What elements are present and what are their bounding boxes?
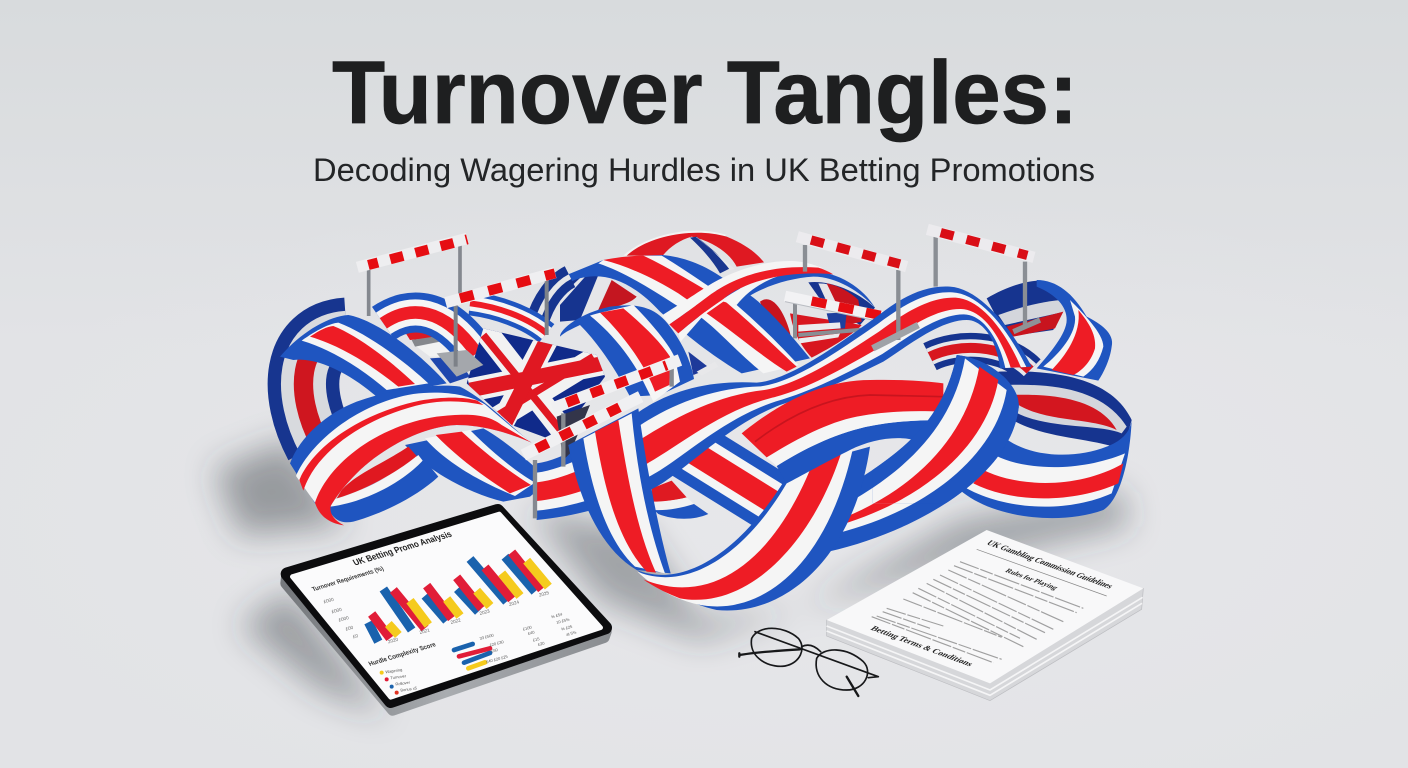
ribbon: lower left return [328,428,550,522]
ribbon: lower right loop [930,348,1132,518]
score legend: at 5% [566,629,577,637]
floor shadows [215,440,1130,715]
chart axis labels: 2025 [538,590,550,598]
small lower band [652,481,708,519]
score legend: 33 £500 [479,632,495,641]
tablet heading: UK Betting Promo Analysis [351,530,454,568]
ribbon: arch over flag [560,305,694,402]
documents: gambling guidelines [827,530,1143,701]
vertical part [568,408,671,573]
score legend: % £54 [551,611,564,619]
score legend: £20 £30 [489,639,505,648]
score legend: £40 £20 £25 [486,654,509,664]
sweep part [637,447,870,611]
chart axis labels: £0 [352,633,359,639]
document subheading: Rules for Playing [1003,567,1061,591]
ribbon: top crossing bands [557,255,875,376]
loop back face [998,371,1132,450]
document footer text: Betting Terms & Conditions [868,625,975,668]
score legend [380,611,577,695]
score bars [454,644,490,668]
ribbon: left upper bands [383,303,547,383]
chart axis labels: 2023 [479,608,491,616]
chart axis labels: £000 [323,597,335,604]
score legend: £40 [527,629,536,636]
hurdle: second left [437,273,555,377]
chart axis labels: £000 [338,615,350,623]
score legend: Rollover [395,680,411,687]
document body lines [872,562,1083,663]
ribbon: left back loop [303,277,570,443]
chart axis labels: £00 [345,625,354,632]
tablet body [286,512,606,710]
band crossing down [557,255,810,373]
subtitle: Decoding Wagering Hurdles in UK Betting Promotions [313,152,1095,188]
score legend: Wagering [385,667,403,674]
chart axis labels: 2024 [508,599,520,607]
band behind long ribbon [930,348,1030,370]
band back left [560,275,637,322]
tablet [286,511,606,710]
gap under front hurdles [557,405,590,460]
document heading: UK Gambling Commission Guidelines [984,539,1115,590]
score legend: £50 [491,647,499,654]
ribbon: left front fold [290,386,532,525]
title: Turnover Tangles: [332,42,1078,142]
chart axis labels: 2022 [450,617,462,625]
hurdle: front centre pair [523,360,680,518]
ribbon: front loop upper [872,355,1019,504]
score legend: 10 £5% [556,617,570,625]
hurdle: upper right front [797,237,918,348]
score heading: Hurdle Complexity Score [368,642,437,668]
ribbon: long crossing band [537,287,1032,520]
bar chart [368,552,548,642]
hurdle: back left [357,238,467,316]
chart heading: Turnover Requirements (%) [311,566,385,593]
chart axis labels [323,590,550,644]
score legend: % £25 [561,624,574,632]
loop front face [960,420,1132,518]
tablet screen [292,514,601,697]
ribbon: under-knot bands [652,440,797,519]
tail [328,447,438,522]
paper stack [827,588,1143,701]
score legend: Turnover [390,673,407,680]
fillers under upper band [402,327,470,383]
ribbon: far right loop [987,280,1112,381]
flag: union jack [466,328,605,438]
glasses [739,628,878,696]
chart axis labels: 2020 [387,637,399,644]
chart axis labels: £000 [331,607,343,614]
ribbon: horizontal knot band [742,380,943,483]
hurdle: inner arch [785,296,890,338]
ribbon: left top band [280,315,447,397]
ribbon tangle [280,231,1132,611]
ribbon: vertical sweep [568,408,870,611]
top sheet [827,530,1143,683]
score legend: £100 [522,624,533,632]
hurdle: far right [927,229,1040,332]
chart axis labels: 2021 [419,627,431,635]
ribbon: top back arc [623,231,764,273]
band crossing up [662,261,875,342]
return band [405,428,550,502]
score legend: Bonus x5 [400,685,418,693]
ribbon: front loop lower [828,355,1019,552]
score legend: £15 [532,636,541,643]
diagonal band [673,440,797,517]
score legend: £20 [537,640,546,647]
bands inside arch [688,282,875,376]
